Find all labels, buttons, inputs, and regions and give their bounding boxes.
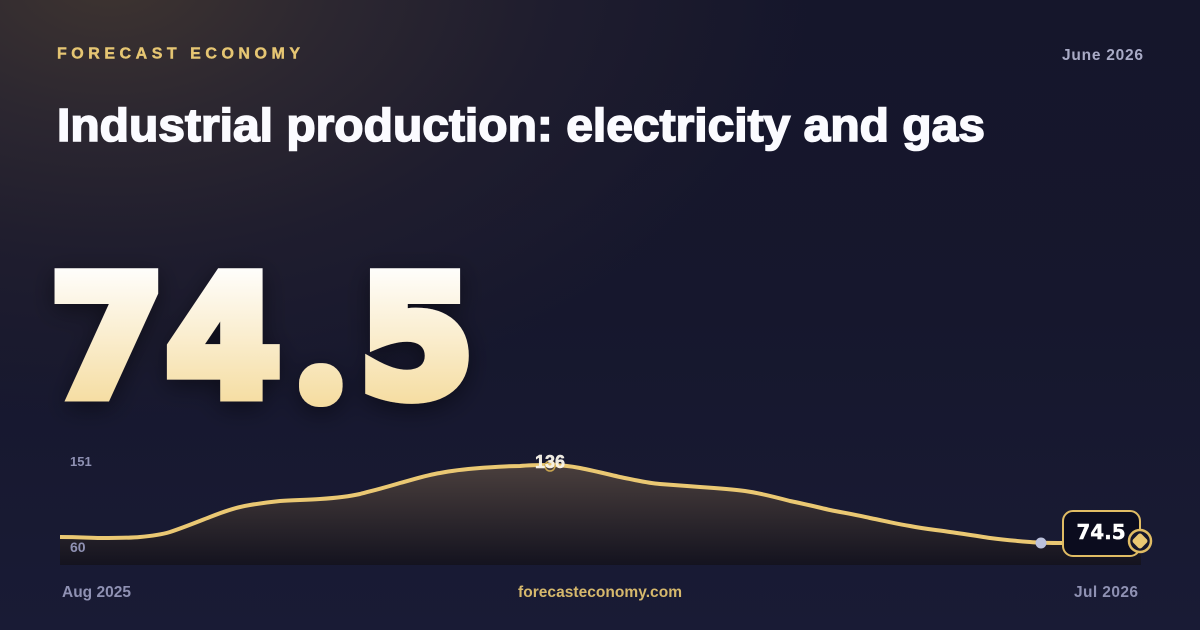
headline value: 4 [166, 242, 281, 434]
website: forecasteconomy.com [518, 584, 682, 601]
axis start date: Aug 2025 [62, 584, 131, 601]
latest point marker [1129, 530, 1151, 552]
chart line [60, 465, 1064, 543]
chart area fill [60, 465, 1141, 565]
latest value callout: 74.5 [1076, 520, 1126, 544]
title: Industrial production: electricity and gas [57, 99, 985, 151]
headline value: 7 [50, 242, 165, 434]
axis min label: 60 [70, 539, 86, 555]
headline value: . [317, 368, 325, 392]
brand label: FORECAST ECONOMY [57, 46, 300, 62]
axis end date: Jul 2026 [1074, 584, 1138, 601]
previous point marker [1036, 538, 1046, 548]
date: June 2026 [1062, 47, 1143, 64]
peak label: 136 [535, 452, 565, 472]
latest value callout [1063, 511, 1140, 556]
headline value: 5 [359, 242, 474, 434]
peak marker [545, 461, 555, 471]
axis max label: 151 [70, 454, 92, 469]
line chart [60, 452, 1141, 565]
